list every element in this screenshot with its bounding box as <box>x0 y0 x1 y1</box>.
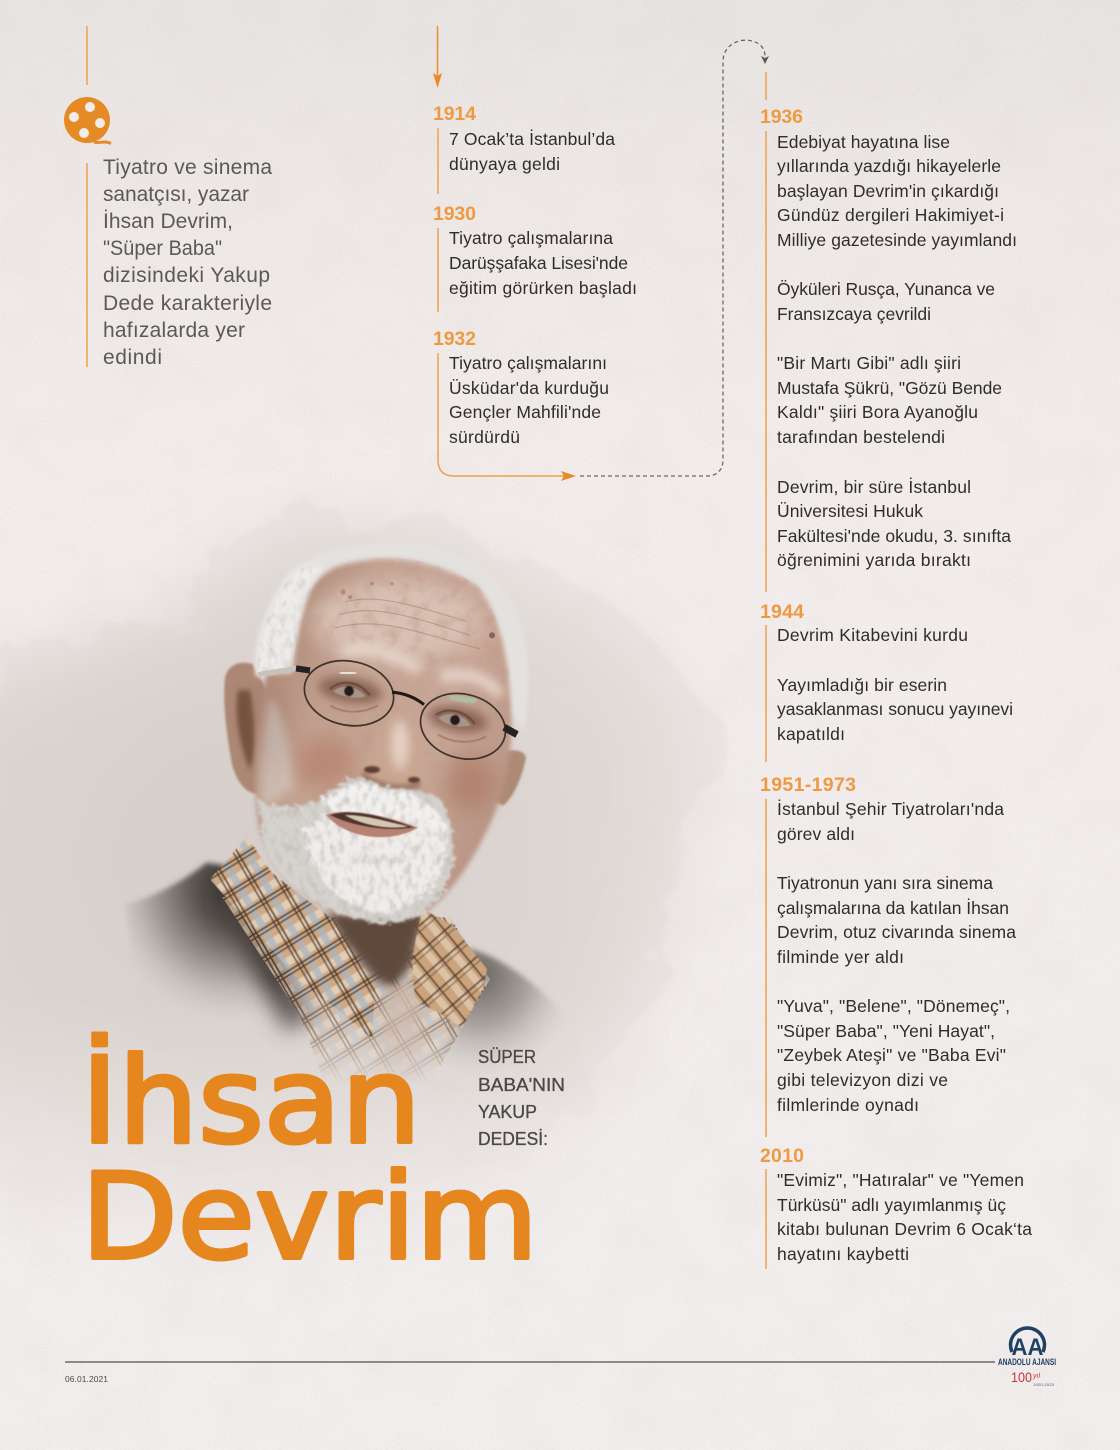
timeline entry 1914 <box>433 103 615 194</box>
timeline entry 1930: 1930 <box>433 203 476 225</box>
intro top rule <box>86 26 88 85</box>
timeline entry 1936: Mustafa Şükrü, "Gözü Bende <box>777 378 1002 398</box>
skin mottling <box>267 558 511 824</box>
title: İhsan Devrim <box>81 1033 538 1287</box>
timeline entry 1936: öğrenimini yarıda bıraktı <box>777 550 971 570</box>
timeline entry 1932: Üsküdar'da kurduğu <box>449 378 609 398</box>
timeline entry 1936: Devrim, bir süre İstanbul <box>777 477 971 497</box>
timeline entry 1951-1973: İstanbul Şehir Tiyatroları'nda <box>777 799 1004 819</box>
name first line: İhsan <box>81 1033 421 1171</box>
timeline entry 1951-1973: 1951-1973 <box>760 774 856 796</box>
timeline entry 1932: Tiyatro çalışmalarını <box>449 353 607 373</box>
timeline entry 1951-1973: "Zeybek Ateşi" ve "Baba Evi" <box>777 1045 1006 1065</box>
mouth <box>326 812 418 837</box>
timeline entry 1936: Öyküleri Rusça, Yunanca ve <box>777 279 995 299</box>
timeline entry 1951-1973: Tiyatronun yanı sıra sinema <box>777 873 993 893</box>
beard <box>258 778 454 923</box>
watercolor cloud behind portrait <box>0 518 703 1251</box>
left side hair <box>257 566 322 675</box>
timeline entry 1944: 1944 <box>760 601 804 623</box>
intro text block <box>87 156 272 369</box>
timeline entry 1951-1973: görev aldı <box>777 824 855 844</box>
head skin <box>256 559 511 919</box>
neck shadow <box>325 912 425 990</box>
arrow: dashed connector to next column <box>580 40 769 476</box>
logo: Anadolu Ajansı 100 yıl: ANADOLU AJANSI <box>998 1357 1056 1367</box>
timeline entry 1936: Milliye gazetesinde yayımlandı <box>777 230 1017 250</box>
left shirt collar <box>210 837 375 1038</box>
timeline entry 1951-1973: Devrim, otuz civarında sinema <box>777 922 1016 942</box>
subtitle: Süper Baba'nın Yakup Dedesi <box>478 1047 565 1149</box>
footer rule <box>65 1361 995 1363</box>
timeline entry 1932: Gençler Mahfili'nde <box>449 402 601 422</box>
timeline entry 1951-1973: gibi televizyon dizi ve <box>777 1070 948 1090</box>
arrow: solid connector turning right <box>438 353 576 481</box>
intro text block: İhsan Devrim, <box>103 210 233 233</box>
timeline entry 1932: 1932 <box>433 328 476 350</box>
right shirt collar <box>412 909 487 1028</box>
arrow: timeline start <box>433 26 442 88</box>
logo: Anadolu Ajansı 100 yıl: 1920-2020 <box>1033 1382 1055 1387</box>
left vest shoulder <box>125 863 330 1086</box>
logo: Anadolu Ajansı 100 yıl <box>998 1328 1056 1387</box>
portrait photo of İhsan Devrim <box>125 543 590 1093</box>
timeline entry 2010: 2010 <box>760 1145 804 1167</box>
right vest shoulder <box>430 948 590 1093</box>
timeline entry 1936: tarafından bestelendi <box>777 427 945 447</box>
timeline entry 1951-1973: filminde yer aldı <box>777 947 904 967</box>
timeline entry 1944: Yayımladığı bir eserin <box>777 675 947 695</box>
timeline entry 1936 <box>760 72 1017 592</box>
intro text block: Dede karakteriyle <box>103 292 272 315</box>
timeline entry 1944: kapatıldı <box>777 724 845 744</box>
timeline entry 1914: dünyaya geldi <box>449 154 560 174</box>
nose <box>362 711 421 789</box>
timeline entry 1951-1973: "Yuva", "Belene", "Dönemeç", <box>777 996 1010 1016</box>
timeline entry 1936: 1936 <box>760 106 803 128</box>
timeline entry 1914: 7 Ocak’ta İstanbul’da <box>449 129 615 149</box>
timeline entry 1930: Tiyatro çalışmalarına <box>449 228 613 248</box>
timeline entry 2010: Türküsü" adlı yayımlanmış üç <box>777 1195 1006 1215</box>
timeline entry 1951-1973: çalışmalarına da katılan İhsan <box>777 898 1009 918</box>
timeline entry 1936: Fakültesi'nde okudu, 3. sınıfta <box>777 526 1011 546</box>
timeline entry 1936: Fransızcaya çevrildi <box>777 304 931 324</box>
logo: Anadolu Ajansı 100 yıl: yıl <box>1032 1373 1040 1380</box>
subtitle: Süper Baba'nın Yakup Dedesi: DEDESİ: <box>478 1129 548 1149</box>
timeline entry 1936: "Bir Martı Gibi" adlı şiiri <box>777 353 961 373</box>
timeline entry 1944: Devrim Kitabevini kurdu <box>777 625 968 645</box>
vest shading along collar <box>232 892 300 1026</box>
icon: film reel <box>64 97 111 144</box>
intro text block: Tiyatro ve sinema <box>103 156 272 179</box>
lower shirt <box>222 897 490 1090</box>
timeline entry 2010: hayatını kaybetti <box>777 1244 909 1264</box>
intro text block: edindi <box>103 346 162 369</box>
intro text block: hafızalarda yer <box>103 319 245 342</box>
timeline entry 1932 <box>433 328 609 447</box>
forehead highlight <box>310 580 480 662</box>
intro text block: sanatçısı, yazar <box>103 183 249 206</box>
chest skin opening <box>380 974 424 1086</box>
timeline entry 1936: yıllarında yazdığı hikayelerle <box>777 156 1001 176</box>
intro text block: "Süper Baba" <box>103 237 222 260</box>
forehead wrinkles and age spots <box>335 582 495 649</box>
date: 06.01.2021 <box>65 1374 108 1384</box>
timeline entry 1944: yasaklanması sonucu yayınevi <box>777 699 1013 719</box>
timeline entry 1936: Gündüz dergileri Hakimiyet-i <box>777 205 1004 225</box>
timeline entry 1930 <box>433 203 637 312</box>
sideburn stubble <box>260 695 294 809</box>
timeline entry 2010: "Evimiz", "Hatıralar" ve "Yemen <box>777 1170 1024 1190</box>
timeline entry 1944 <box>760 601 1013 762</box>
timeline entry 1914: 1914 <box>433 103 476 125</box>
subtitle: Süper Baba'nın Yakup Dedesi: BABA'NIN <box>478 1075 565 1095</box>
back hair <box>255 543 528 731</box>
timeline entry 1936: Üniversitesi Hukuk <box>777 501 923 521</box>
timeline entry 1951-1973 <box>760 774 1016 1137</box>
eye sockets shadow <box>317 673 490 737</box>
timeline entry 2010: kitabı bulunan Devrim 6 Ocak‘ta <box>777 1219 1032 1239</box>
timeline entry 1930: eğitim görürken başladı <box>449 278 637 298</box>
timeline entry 1951-1973: "Süper Baba", "Yeni Hayat", <box>777 1021 995 1041</box>
logo: Anadolu Ajansı 100 yıl: AA <box>1012 1334 1044 1361</box>
timeline entry 1951-1973: filmlerinde oynadı <box>777 1095 919 1115</box>
eyes <box>330 683 486 742</box>
subtitle: Süper Baba'nın Yakup Dedesi: YAKUP <box>478 1102 537 1122</box>
logo: Anadolu Ajansı 100 yıl: 100 <box>1011 1369 1032 1385</box>
timeline entry 1936: başlayan Devrim'in çıkardığı <box>777 181 999 201</box>
timeline entry 1930: Darüşşafaka Lisesi'nde <box>449 253 628 273</box>
brow ridge highlights <box>340 649 500 695</box>
timeline entry 2010 <box>760 1145 1032 1269</box>
left ear <box>224 663 275 794</box>
intro text block: dizisindeki Yakup <box>103 264 270 287</box>
timeline entry 1932: sürdürdü <box>449 427 520 447</box>
name second line: Devrim <box>81 1149 538 1287</box>
timeline entry 1936: Edebiyat hayatına lise <box>777 132 950 152</box>
timeline entry 1936: Kaldı" şiiri Bora Ayanoğlu <box>777 402 978 422</box>
glasses <box>258 654 517 767</box>
subtitle: Süper Baba'nın Yakup Dedesi: SÜPER <box>478 1047 536 1067</box>
cheek colouring <box>263 690 494 812</box>
right ear <box>490 750 526 806</box>
